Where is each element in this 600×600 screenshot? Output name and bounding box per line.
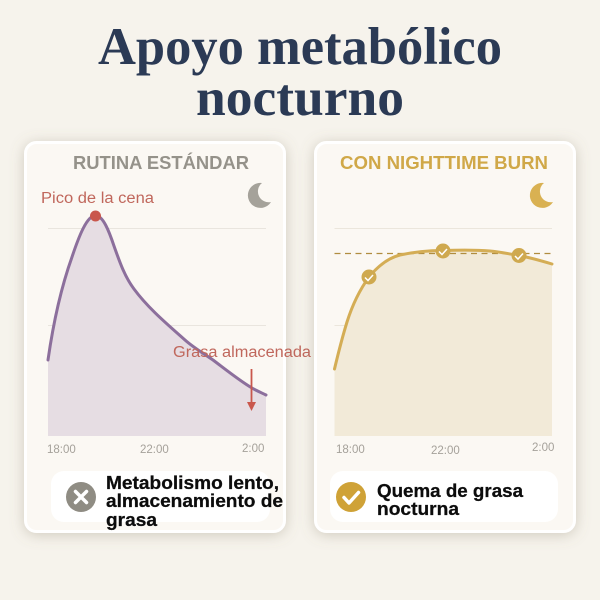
panel: con nighttime burn	[316, 142, 574, 532]
icon: cross	[66, 482, 96, 512]
callout text: Quema de grasa	[377, 481, 524, 501]
title: nocturno	[196, 69, 404, 127]
callout text: grasa	[106, 510, 158, 530]
area chart: glucose curve	[48, 216, 266, 436]
panel: rutina estándar	[26, 142, 311, 532]
card background	[26, 142, 284, 532]
callout: night fat burn	[330, 471, 558, 522]
x axis labels: 2:00	[242, 443, 264, 455]
callout: slow metabolism	[51, 471, 283, 530]
callout text	[106, 473, 283, 530]
icon: moon	[248, 183, 271, 208]
x axis labels: 22:00	[140, 444, 169, 456]
label: grasa almacenada: Grasa almacenada	[173, 344, 311, 361]
heading: CON NIGHTTIME BURN	[340, 153, 548, 173]
heading: RUTINA ESTÁNDAR	[73, 152, 249, 173]
x axis labels	[336, 442, 554, 457]
grid lines	[48, 228, 266, 326]
target dashed line	[334, 252, 553, 254]
x axis labels: 18:00	[47, 444, 76, 456]
x axis labels: 18:00	[336, 444, 365, 456]
callout text: nocturna	[377, 499, 460, 519]
area chart: steady burn curve	[334, 250, 553, 436]
callout text: Metabolismo lento,	[106, 473, 279, 493]
card background	[316, 142, 574, 532]
grid lines	[334, 228, 552, 326]
icon: check	[336, 482, 366, 512]
title	[98, 18, 502, 127]
icon: moon	[530, 183, 553, 208]
peak marker	[90, 210, 101, 222]
arrow: down	[247, 369, 256, 411]
x axis labels	[47, 443, 264, 456]
x axis labels: 22:00	[431, 445, 460, 457]
x axis labels: 2:00	[532, 442, 554, 454]
callout text: almacenamiento de	[106, 491, 283, 511]
markers: check points	[362, 244, 526, 284]
label: pico de la cena: Pico de la cena	[41, 190, 154, 207]
title: Apoyo metabólico	[98, 18, 502, 76]
callout text	[377, 481, 524, 519]
